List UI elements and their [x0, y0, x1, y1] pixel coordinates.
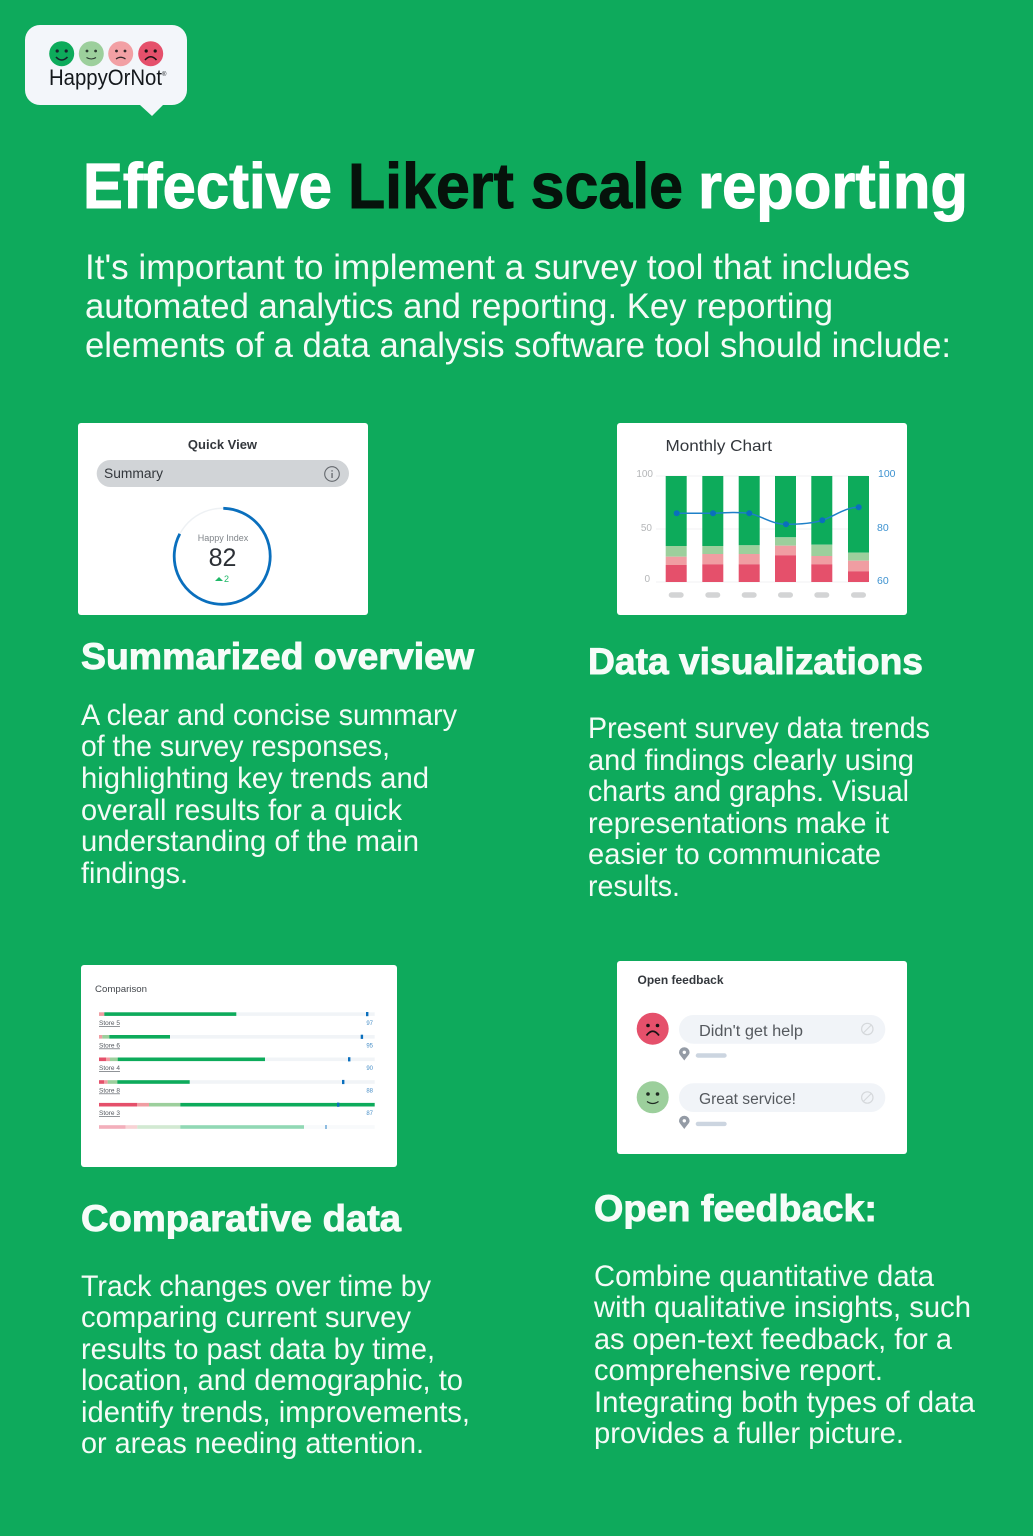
text block: comparative data: comparing current survey: [81, 1301, 411, 1334]
text block: data visualizations: easier to communicate: [588, 838, 881, 871]
text block: open feedback: provides a fuller picture.: [594, 1417, 904, 1450]
intro text: It's important to implement a survey tool that includes: [85, 248, 910, 287]
panel: monthly chart screenshot: 50: [641, 523, 652, 534]
panel: monthly chart screenshot: Monthly Chart: [666, 438, 773, 455]
row: Store 4: Store 4: [99, 1065, 120, 1072]
text block: open feedback: Combine quantitative data: [594, 1260, 934, 1293]
panel: summarized overview screenshot: 2: [224, 574, 229, 584]
row: Store 3: [99, 1103, 375, 1117]
panel: summarized overview screenshot: Quick View: [188, 437, 258, 452]
panel: summarized overview screenshot: Summary: [104, 466, 163, 481]
panel: summarized overview screenshot: Happy Index: [198, 533, 249, 543]
text block: comparative data: Track changes over time by: [81, 1270, 431, 1303]
intro text: automated analytics and reporting. Key reporting: [85, 287, 833, 326]
panel: monthly chart screenshot: 0: [644, 574, 650, 585]
text block: open feedback: Integrating both types of data: [594, 1386, 975, 1419]
text block: summarized overview: findings.: [81, 857, 188, 890]
text block: summarized overview: highlighting key trends and: [81, 762, 429, 795]
heading: comparative data: Comparative data: [81, 1198, 401, 1239]
logo: HappyOrNot speech bubble: HappyOrNot: [49, 65, 162, 90]
logo: HappyOrNot speech bubble: [25, 25, 187, 116]
logo: HappyOrNot speech bubble: ®: [162, 71, 167, 78]
panel: summarized overview screenshot: [78, 423, 368, 615]
title: Likert scale: [348, 150, 683, 222]
feedback: negative comment: [637, 1013, 885, 1060]
panel: comparison screenshot: [81, 965, 397, 1167]
axis label placeholders: [669, 592, 866, 598]
text block: data visualizations: results.: [588, 870, 680, 903]
intro text: elements of a data analysis software tool should include:: [85, 326, 951, 365]
panel: open feedback screenshot: Open feedback: [638, 975, 724, 987]
text block: open feedback: comprehensive report.: [594, 1354, 883, 1387]
stacked bars: [666, 476, 869, 582]
text block: summarized overview: of the survey responses,: [81, 730, 390, 763]
row: Store 3: Store 3: [99, 1110, 120, 1117]
title: reporting: [698, 150, 968, 222]
panel: open feedback screenshot: [617, 961, 907, 1154]
panel: monthly chart screenshot: 100: [878, 468, 896, 480]
row: Store 5: Store 5: [99, 1020, 120, 1027]
text block: comparative data: [81, 1270, 470, 1460]
text block: comparative data: or areas needing attention.: [81, 1427, 424, 1460]
heading: data visualizations: Data visualizations: [588, 641, 923, 682]
title: [83, 150, 968, 222]
feedback: negative comment: Didn't get help: [699, 1023, 803, 1040]
row: Store 4: 90: [366, 1066, 374, 1072]
heading: open feedback: Open feedback:: [594, 1188, 877, 1229]
text block: open feedback: [593, 1260, 975, 1450]
heading: summarized overview: Summarized overview: [81, 636, 474, 677]
text block: open feedback: as open-text feedback, for a: [594, 1323, 952, 1356]
text block: data visualizations: charts and graphs. Visual: [588, 775, 909, 808]
feedback: positive comment: [637, 1081, 885, 1129]
text block: data visualizations: representations make it: [588, 807, 890, 840]
row: Store 8: [99, 1080, 375, 1094]
panel: summarized overview screenshot: 82: [209, 544, 236, 572]
panel: monthly chart screenshot: 80: [877, 522, 889, 534]
panel: comparison screenshot: Comparison: [95, 984, 147, 995]
feedback: positive comment: Great service!: [699, 1091, 796, 1108]
text block: summarized overview: [81, 699, 457, 890]
text block: data visualizations: and findings clearly using: [588, 744, 914, 777]
row: Store 6: 95: [366, 1044, 374, 1050]
text block: comparative data: identify trends, improvements,: [81, 1396, 470, 1429]
row: faded bar: [99, 1125, 375, 1129]
text block: summarized overview: A clear and concise summary: [81, 699, 457, 732]
row: Store 5: [99, 1012, 375, 1027]
panel: monthly chart screenshot: 100: [636, 469, 653, 480]
row: Store 8: 88: [366, 1088, 374, 1094]
intro text: [85, 248, 951, 365]
panel: monthly chart screenshot: [617, 423, 907, 615]
text block: summarized overview: understanding of the main: [81, 825, 419, 858]
row: Store 5: 97: [366, 1021, 374, 1027]
panel: monthly chart screenshot: 60: [877, 575, 889, 587]
text block: data visualizations: Present survey data trends: [588, 712, 930, 745]
row: Store 8: Store 8: [99, 1088, 120, 1094]
row: Store 3: 87: [366, 1111, 374, 1117]
row: Store 4: [99, 1057, 375, 1072]
row: Store 6: [99, 1035, 375, 1050]
text block: summarized overview: overall results for a quick: [81, 794, 403, 827]
row: Store 6: Store 6: [99, 1042, 120, 1050]
text block: open feedback: with qualitative insights, such: [593, 1291, 971, 1324]
text block: comparative data: results to past data by time,: [81, 1333, 435, 1366]
text block: data visualizations: [588, 712, 930, 903]
text block: comparative data: location, and demographic, to: [81, 1364, 463, 1397]
trend line: [674, 504, 862, 527]
title: Effective: [83, 150, 332, 222]
